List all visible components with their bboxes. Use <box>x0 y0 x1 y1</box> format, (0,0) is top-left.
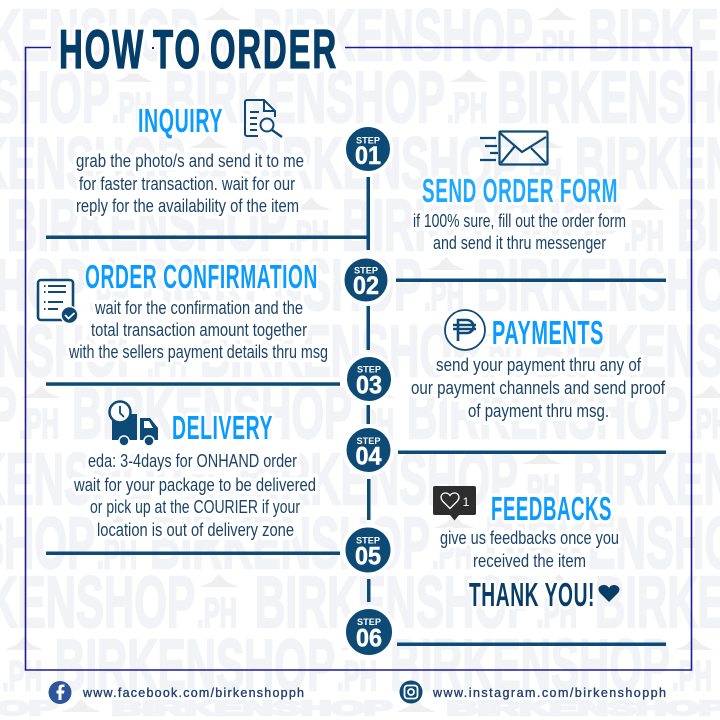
step 06 badge <box>344 607 394 657</box>
timeline connectors <box>46 177 666 646</box>
icon: like notification: 1 <box>463 495 470 509</box>
text: .PH <box>197 589 237 636</box>
text: .PH <box>424 272 464 319</box>
thank you message: THANK YOU! <box>469 576 595 613</box>
step 02 badge: 02 <box>353 272 379 300</box>
text: .PH <box>147 338 187 385</box>
step 03 badge <box>345 355 393 403</box>
text: .PH <box>187 150 227 197</box>
footer: facebook link: www.facebook.com/birkenshopph <box>82 686 304 700</box>
payments text <box>411 355 666 421</box>
text: BIRKENSHOP <box>240 124 520 204</box>
order confirmation text: total transaction amount together <box>91 320 307 340</box>
title <box>59 18 338 80</box>
step 06 badge: STEP <box>357 617 382 628</box>
step 04 badge: STEP <box>356 436 381 447</box>
text: .PH <box>354 400 394 447</box>
text: .PH <box>520 466 560 513</box>
delivery text: or pick up at the COURIER if your <box>90 497 300 517</box>
text: BIRKENSHOP <box>238 440 518 520</box>
feedbacks text: give us feedbacks once you <box>440 528 619 548</box>
text: BIRKENSHOP <box>165 58 445 138</box>
inquiry heading: INQUIRY <box>138 102 223 139</box>
panel: send order form <box>413 132 626 253</box>
step 01 badge: STEP <box>356 136 381 146</box>
icon: like notification <box>433 486 476 520</box>
feedbacks text <box>440 528 619 571</box>
feedbacks heading: FEEDBACKS <box>491 490 612 527</box>
text: .PH <box>447 84 487 131</box>
send order form text <box>413 211 626 253</box>
icon: checklist <box>38 280 78 324</box>
delivery text: wait for your package to be delivered <box>73 475 316 495</box>
payments text: of payment thru msg. <box>468 401 609 421</box>
text: BIRKENSHOP <box>200 312 480 392</box>
icon: peso coin <box>445 310 485 350</box>
footer: instagram link <box>400 680 666 704</box>
delivery heading: DELIVERY <box>172 409 273 446</box>
delivery text: location is out of delivery zone <box>97 520 294 540</box>
step 03 badge: 03 <box>356 372 382 400</box>
text: .PH <box>19 400 59 447</box>
inquiry text: grab the photo/s and send it to me <box>76 151 304 171</box>
panel: payments <box>411 310 666 421</box>
text: .PH <box>200 22 240 69</box>
step 05 badge: 05 <box>355 542 381 570</box>
step 05 badge <box>344 526 392 574</box>
text: BIRKENSHOP <box>150 504 430 584</box>
panel: inquiry <box>76 100 304 216</box>
inquiry text: for faster transaction. wait for our <box>79 174 295 194</box>
text: .PH <box>432 530 472 577</box>
text: .PH <box>537 589 577 636</box>
title: HOW TO ORDER <box>59 18 338 80</box>
inquiry text <box>76 151 304 216</box>
delivery text: eda: 3-4days for ONHAND order <box>88 451 297 471</box>
text: .PH <box>482 338 522 385</box>
panel: delivery <box>73 402 316 540</box>
order confirmation text: with the sellers payment details thru msg <box>68 342 328 362</box>
step 01 badge <box>344 125 392 173</box>
text: .PH <box>112 84 152 131</box>
step 02 badge: STEP <box>354 266 379 276</box>
step 01 badge: 01 <box>355 142 381 170</box>
text: BIRKENSHOP <box>142 246 422 326</box>
frame border <box>26 48 692 670</box>
footer: instagram link: www.instagram.com/birkenshopph <box>432 686 666 700</box>
text: BIRKENSHOP <box>112 698 392 720</box>
order confirmation heading: ORDER CONFIRMATION <box>85 258 318 295</box>
step 04 badge: 04 <box>356 442 382 470</box>
text: .PH <box>2 652 42 699</box>
payments text: our payment channels and send proof <box>411 378 666 398</box>
panel: feedbacks <box>433 486 619 613</box>
step 02 badge <box>342 256 390 304</box>
thank you message <box>469 576 619 613</box>
payments heading: PAYMENTS <box>492 314 604 351</box>
text: .PH <box>535 22 575 69</box>
delivery text <box>73 451 316 540</box>
payments text: send your payment thru any of <box>436 355 642 375</box>
send order form text: and send it thru messenger <box>433 233 606 253</box>
text: .PH <box>624 212 664 259</box>
text: .PH <box>97 530 137 577</box>
text: .PH <box>89 272 129 319</box>
inquiry text: reply for the availability of the item <box>76 196 299 216</box>
icon: delivery truck with clock <box>110 402 158 446</box>
icon: document search <box>245 100 282 137</box>
text: BIRKENSHOP <box>7 186 287 266</box>
step 05 badge: STEP <box>356 536 381 546</box>
feedbacks text: received the item <box>473 551 586 571</box>
text: .PH <box>185 466 225 513</box>
icon: envelope <box>480 132 548 164</box>
title: HOW TO ORDER <box>59 18 338 80</box>
text: BIRKENSHOP <box>447 698 720 720</box>
text: .PH <box>337 652 377 699</box>
order confirmation text <box>68 298 328 362</box>
footer: facebook link <box>48 681 304 704</box>
step 03 badge: STEP <box>357 364 382 376</box>
send order form text: if 100% sure, fill out the order form <box>413 211 626 231</box>
step 06 badge: 06 <box>356 624 382 652</box>
text: BIRKENSHOP <box>72 374 352 454</box>
order confirmation text: wait for the confirmation and the <box>94 298 303 318</box>
step 04 badge <box>344 426 392 474</box>
text: .PH <box>289 212 329 259</box>
text: .PH <box>522 150 562 197</box>
text: BIRKENSHOP <box>55 626 335 706</box>
panel: order confirmation <box>38 258 328 362</box>
